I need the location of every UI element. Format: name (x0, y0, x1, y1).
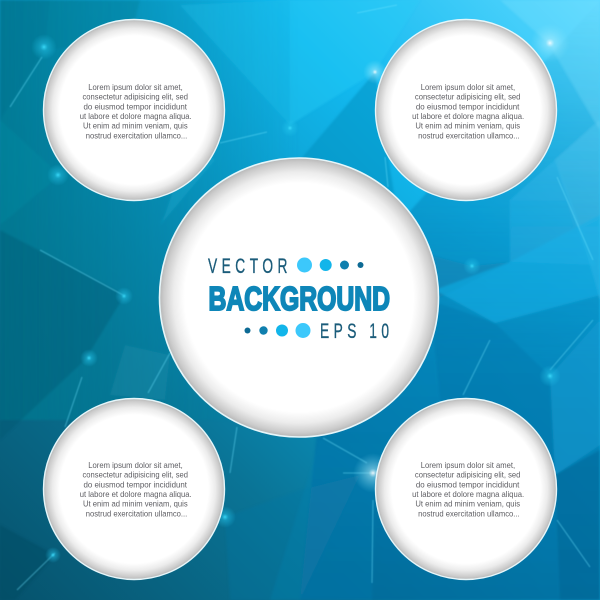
text block: bottom-left lorem ipsum: do eiusmod tempor incididunt (84, 479, 188, 489)
text block: top-left lorem ipsum: Lorem ipsum dolor sit amet, (88, 82, 183, 92)
text block: bottom-right lorem ipsum: Lorem ipsum dolor sit amet, (421, 460, 515, 470)
text block: bottom-left lorem ipsum: Ut enim ad minim veniam, quis (83, 499, 188, 509)
panel: central title circle (160, 158, 438, 437)
panel: top-left text circle (44, 20, 224, 200)
text block: bottom-right lorem ipsum: consectetur adipisicing elit, sed (415, 470, 521, 480)
text block: bottom-right lorem ipsum: ut labore et dolore magna aliqua. (412, 489, 524, 499)
panel: bottom-right text circle (376, 398, 556, 580)
heading: BACKGROUND: BACKGROUND (208, 281, 390, 318)
text block: bottom-left lorem ipsum: Lorem ipsum dolor sit amet, (88, 460, 183, 470)
text block: top-right lorem ipsum: Lorem ipsum dolor sit amet, (421, 82, 515, 92)
heading: EPS 10: EPS 10 (320, 319, 393, 343)
text block: top-right lorem ipsum: Ut enim ad minim veniam, quis (415, 121, 520, 131)
panel: top-right text circle (376, 20, 556, 200)
panel: bottom-left text circle (44, 398, 224, 580)
text block: top-left lorem ipsum: Ut enim ad minim veniam, quis (83, 121, 188, 131)
text block: top-left lorem ipsum: nostrud exercitation ullamco... (86, 130, 187, 140)
text block: bottom-left lorem ipsum: consectetur adipisicing elit, sed (82, 470, 188, 480)
text block: top-left lorem ipsum: consectetur adipisicing elit, sed (82, 92, 188, 102)
text block: top-right lorem ipsum: nostrud exercitation ullamco... (418, 130, 520, 140)
text block: top-left lorem ipsum: do eiusmod tempor incididunt (84, 101, 188, 111)
text block: top-right lorem ipsum: do eiusmod tempor incididunt (416, 101, 520, 111)
text block: bottom-left lorem ipsum: nostrud exercitation ullamco... (86, 508, 187, 518)
text block: top-right lorem ipsum: consectetur adipisicing elit, sed (415, 92, 521, 102)
text block: bottom-left lorem ipsum: ut labore et dolore magna aliqua. (80, 489, 192, 499)
heading: VECTOR: VECTOR (208, 254, 292, 278)
dots: top row (297, 258, 364, 272)
text block: bottom-right lorem ipsum: Ut enim ad minim veniam, quis (415, 499, 520, 509)
text block: top-right lorem ipsum: ut labore et dolore magna aliqua. (412, 111, 524, 121)
text block: top-left lorem ipsum: ut labore et dolore magna aliqua. (80, 111, 192, 121)
text block: bottom-right lorem ipsum: do eiusmod tempor incididunt (416, 479, 520, 489)
text block: bottom-right lorem ipsum: nostrud exercitation ullamco... (418, 508, 520, 518)
dots: bottom row (244, 323, 310, 338)
